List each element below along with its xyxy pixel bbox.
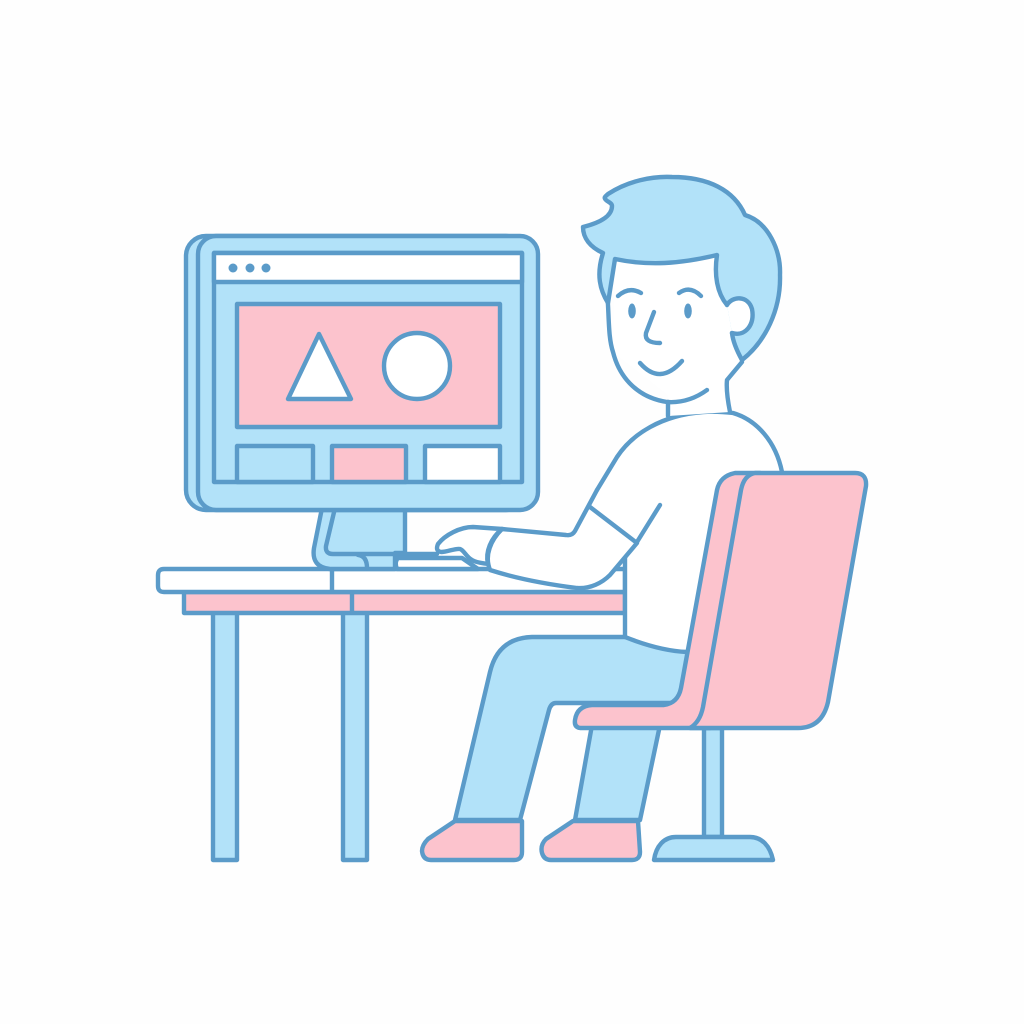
monitor casing front	[198, 236, 538, 510]
thumbnail blue	[237, 446, 313, 482]
front shoe	[422, 821, 522, 860]
desk pink apron	[184, 592, 625, 613]
chair post	[704, 728, 722, 837]
monitor stand	[314, 508, 437, 569]
chair	[575, 473, 866, 860]
chair side panel and seat	[575, 473, 760, 728]
monitor	[186, 236, 538, 510]
eyes	[628, 304, 692, 318]
monitor casing back	[186, 236, 526, 510]
desk top	[158, 569, 625, 592]
sleeve	[488, 490, 637, 588]
neck	[613, 259, 745, 416]
desk	[158, 569, 625, 860]
back shoe	[542, 821, 640, 860]
hair	[583, 177, 780, 360]
back leg	[575, 725, 660, 820]
desk leg right	[343, 612, 367, 860]
hero image panel	[237, 304, 500, 427]
browser title bar	[214, 253, 522, 282]
arm	[437, 490, 660, 588]
ear	[727, 298, 753, 334]
thumbnail white	[425, 446, 500, 482]
face outline	[608, 259, 707, 402]
chair back panel	[690, 473, 866, 728]
screen area	[214, 253, 522, 482]
hand	[437, 527, 502, 564]
torso	[575, 412, 782, 652]
person	[422, 177, 782, 860]
thumbnail pink	[332, 446, 406, 482]
smile	[640, 361, 682, 374]
front leg and thigh	[455, 637, 700, 820]
eyebrows	[618, 290, 701, 296]
shirt crease	[637, 505, 660, 542]
chair base	[654, 837, 773, 860]
keyboard	[396, 558, 478, 569]
desk leg left	[213, 612, 237, 860]
nose	[646, 312, 660, 343]
